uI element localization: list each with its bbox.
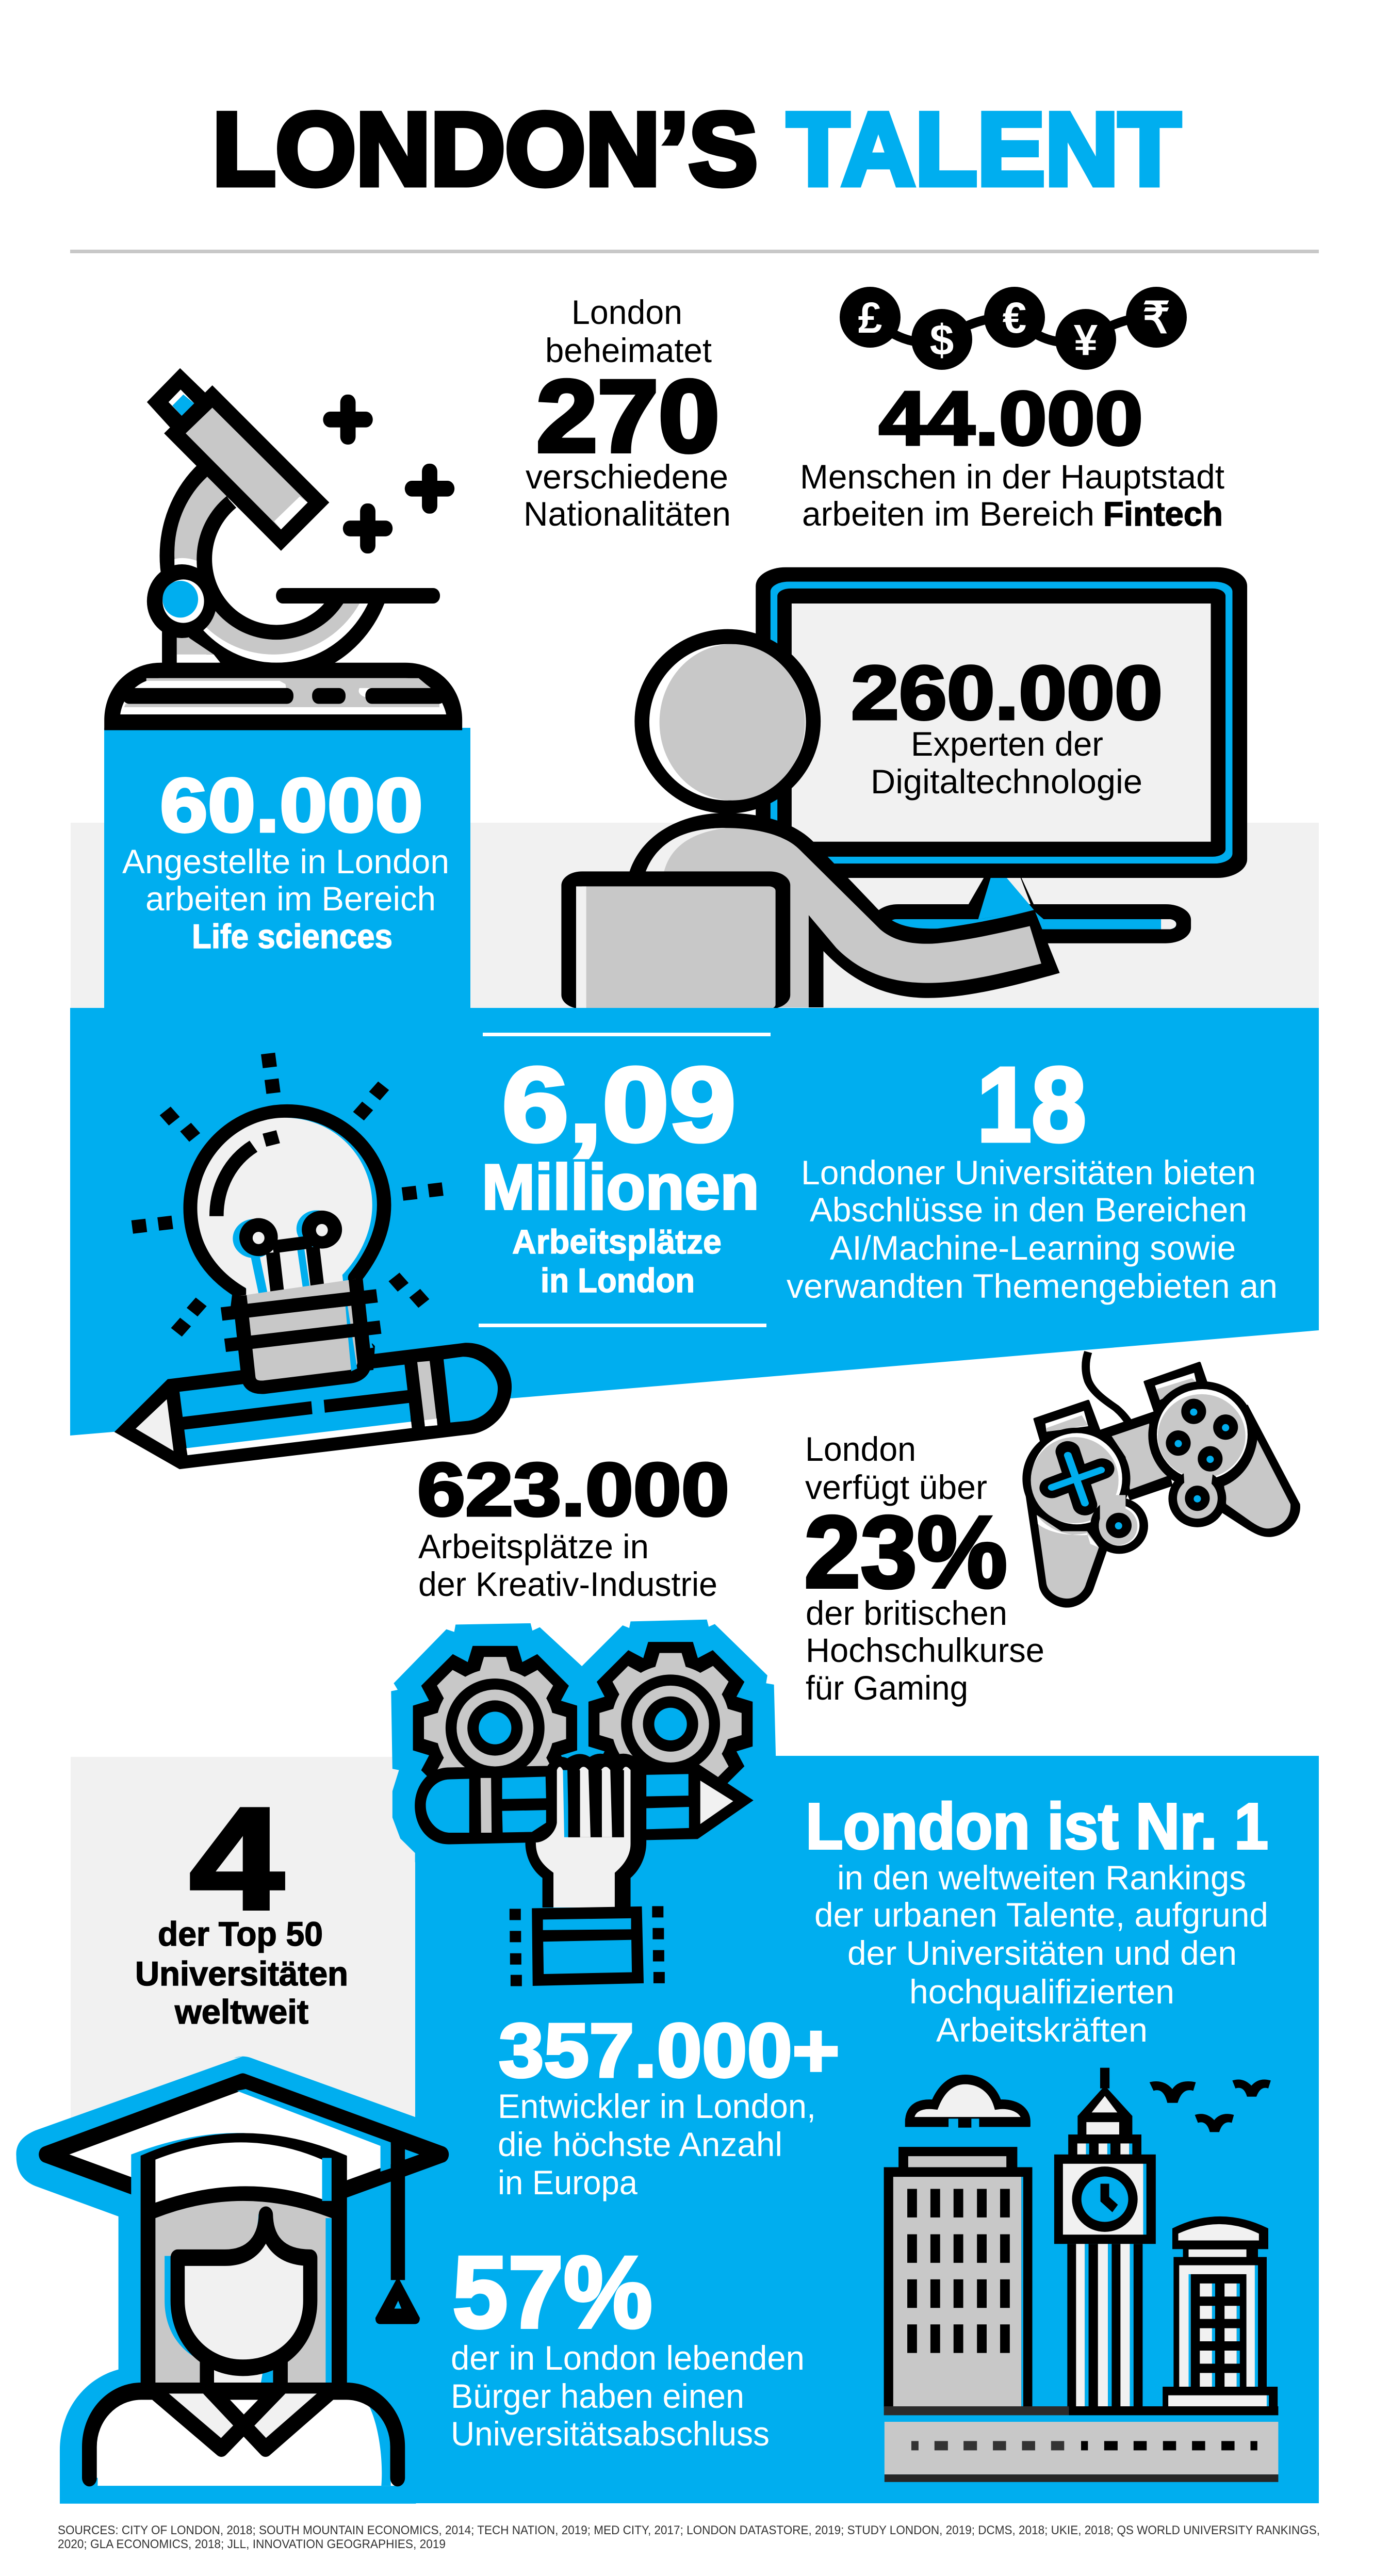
text block: 18 universities: Abschlüsse in den Bereichen: [810, 1191, 1247, 1229]
text block: top 50 universities: weltweit: [174, 1993, 308, 2031]
text block: London is number 1: der Universitäten und den: [847, 1934, 1237, 1972]
icon: currency coins: [840, 287, 1187, 370]
panel: blue lower section: [415, 1756, 1319, 2503]
text block: top 50 universities: [135, 1779, 348, 2031]
panel: blue slanted band: [70, 1008, 1319, 1436]
text block: 23% gaming courses: 23%: [804, 1495, 1007, 1609]
text block: 60.000 life sciences: [122, 763, 449, 955]
text block: 18 universities: 18: [977, 1046, 1086, 1164]
panel: life sciences: [104, 728, 470, 1009]
office building: [884, 2147, 1032, 2407]
clock tower: [1054, 2068, 1156, 2407]
text block: 6,09 million jobs: Arbeitsplätze: [512, 1222, 722, 1261]
text block: 23% gaming courses: London: [805, 1430, 916, 1468]
text block: 57% degree: [451, 2235, 805, 2453]
text block: 260.000 digital technology: 260.000: [851, 650, 1163, 736]
text block: 260.000 digital technology: Experten der: [911, 725, 1103, 763]
text block: London is number 1: hochqualifizierten: [909, 1972, 1174, 2011]
sources: [58, 2523, 1320, 2551]
text block: 23% gaming courses: [804, 1430, 1044, 1707]
text block: 44.000 fintech: Menschen in der Hauptstadt: [800, 458, 1224, 496]
text block: 18 universities: AI/Machine-Learning sowie: [830, 1229, 1236, 1267]
text block: 44.000 fintech: [800, 376, 1224, 533]
text block: 260.000 digital technology: Digitaltechnologie: [871, 762, 1142, 801]
text block: 270 nationalities: 270: [536, 359, 719, 473]
icon: currency coins: €: [1003, 294, 1026, 342]
text block: 623.000 creative jobs: [417, 1447, 729, 1603]
sources: 2020; GLA ECONOMICS, 2018; JLL, INNOVATION GEOGRAPHIES, 2019: [58, 2537, 446, 2551]
icon: currency coins: £: [858, 294, 882, 342]
text block: 23% gaming courses: verfügt über: [805, 1468, 987, 1506]
title: LONDON’S: [212, 92, 758, 207]
text block: 357.000 developers: [498, 2008, 840, 2202]
text block: 18 universities: verwandten Themengebieten an: [787, 1267, 1278, 1305]
text block: 6,09 million jobs: Millionen: [482, 1152, 759, 1223]
text block: 6,09 million jobs: [479, 1033, 771, 1327]
title: [212, 92, 1181, 207]
sources: SOURCES: CITY OF LONDON, 2018; SOUTH MOUNTAIN ECONOMICS, 2014; TECH NATION, 2019; MED CITY, 2017; LONDON DATASTORE, 2019; STUDY LONDON, 2019; DCMS, 2018; UKIE, 2018; QS WORLD UNIVERSITY RANKINGS,: [58, 2523, 1320, 2537]
text block: 23% gaming courses: Hochschulkurse: [806, 1631, 1044, 1669]
text block: London is number 1: London ist Nr. 1: [806, 1790, 1268, 1863]
text block: 18 universities: [787, 1046, 1278, 1305]
icon: gears, pencil and hand: [391, 1620, 776, 1986]
icon: light bulb on pencil: [115, 1053, 512, 1469]
icon: currency coins: ₹: [1142, 294, 1170, 342]
text block: 357.000 developers: Entwickler in London,: [498, 2087, 816, 2125]
text block: 60.000 life sciences: 60.000: [160, 763, 423, 848]
text block: 23% gaming courses: für Gaming: [806, 1669, 968, 1707]
text block: 260.000 digital technology: [851, 650, 1163, 801]
phone box: [1163, 2216, 1278, 2409]
text block: 357.000 developers: die höchste Anzahl: [498, 2125, 782, 2163]
text block: 6,09 million jobs: 6,09: [502, 1046, 736, 1164]
text block: top 50 universities: Universitäten: [135, 1954, 348, 1993]
text block: 57% degree: Universitätsabschluss: [451, 2415, 770, 2453]
panel: top universities grey: [71, 1757, 415, 2118]
icon: currency coins: ¥: [1074, 316, 1098, 364]
text block: 623.000 creative jobs: 623.000: [417, 1447, 729, 1531]
text block: 270 nationalities: [524, 293, 731, 533]
icon: game controller: [1022, 1352, 1300, 1608]
text block: 44.000 fintech: arbeiten im Bereich: [802, 495, 1094, 533]
text block: 623.000 creative jobs: Arbeitsplätze in: [418, 1527, 649, 1566]
cloud: [905, 2079, 1030, 2128]
text block: 18 universities: Londoner Universitäten bieten: [801, 1153, 1256, 1192]
text block: 44.000 fintech: Fintech: [1103, 495, 1223, 533]
text block: 623.000 creative jobs: der Kreativ-Industrie: [418, 1565, 717, 1603]
text block: 57% degree: Bürger haben einen: [451, 2377, 744, 2415]
text block: 57% degree: der in London lebenden: [451, 2339, 805, 2377]
text block: top 50 universities: 4: [190, 1779, 285, 1939]
text block: top 50 universities: der Top 50: [158, 1915, 323, 1953]
text block: 57% degree: 57%: [452, 2235, 652, 2349]
text block: 60.000 life sciences: Angestellte in London: [122, 842, 449, 881]
text block: 357.000 developers: 357.000+: [499, 2008, 840, 2093]
icon: person at computer: [561, 567, 1247, 1009]
icon: London skyline: [884, 2068, 1278, 2482]
panel: light grey strip behind digital technology: [71, 823, 1319, 1009]
text block: London is number 1: in den weltweiten Rankings: [837, 1858, 1246, 1897]
text block: 270 nationalities: London: [571, 293, 682, 331]
text block: 23% gaming courses: der britischen: [806, 1594, 1007, 1632]
birds: [1150, 2079, 1271, 2132]
text block: 357.000 developers: in Europa: [498, 2163, 637, 2202]
text block: 44.000 fintech: 44.000: [879, 376, 1143, 461]
text block: 270 nationalities: verschiedene: [526, 458, 728, 496]
text block: 270 nationalities: Nationalitäten: [524, 495, 731, 533]
text block: 6,09 million jobs: in London: [541, 1261, 695, 1299]
text block: London is number 1: [806, 1790, 1268, 2049]
icon: graduate: [16, 2057, 441, 2504]
text block: 60.000 life sciences: Life sciences: [192, 917, 393, 955]
text block: London is number 1: Arbeitskräften: [936, 2011, 1148, 2049]
title: TALENT: [787, 92, 1181, 207]
icon: currency coins: $: [930, 316, 954, 364]
text block: 270 nationalities: beheimatet: [545, 331, 712, 369]
icon: microscope: [104, 368, 466, 730]
text block: London is number 1: der urbanen Talente, aufgrund: [814, 1896, 1268, 1934]
text block: 60.000 life sciences: arbeiten im Bereich: [145, 879, 436, 918]
road: [884, 2406, 1278, 2482]
